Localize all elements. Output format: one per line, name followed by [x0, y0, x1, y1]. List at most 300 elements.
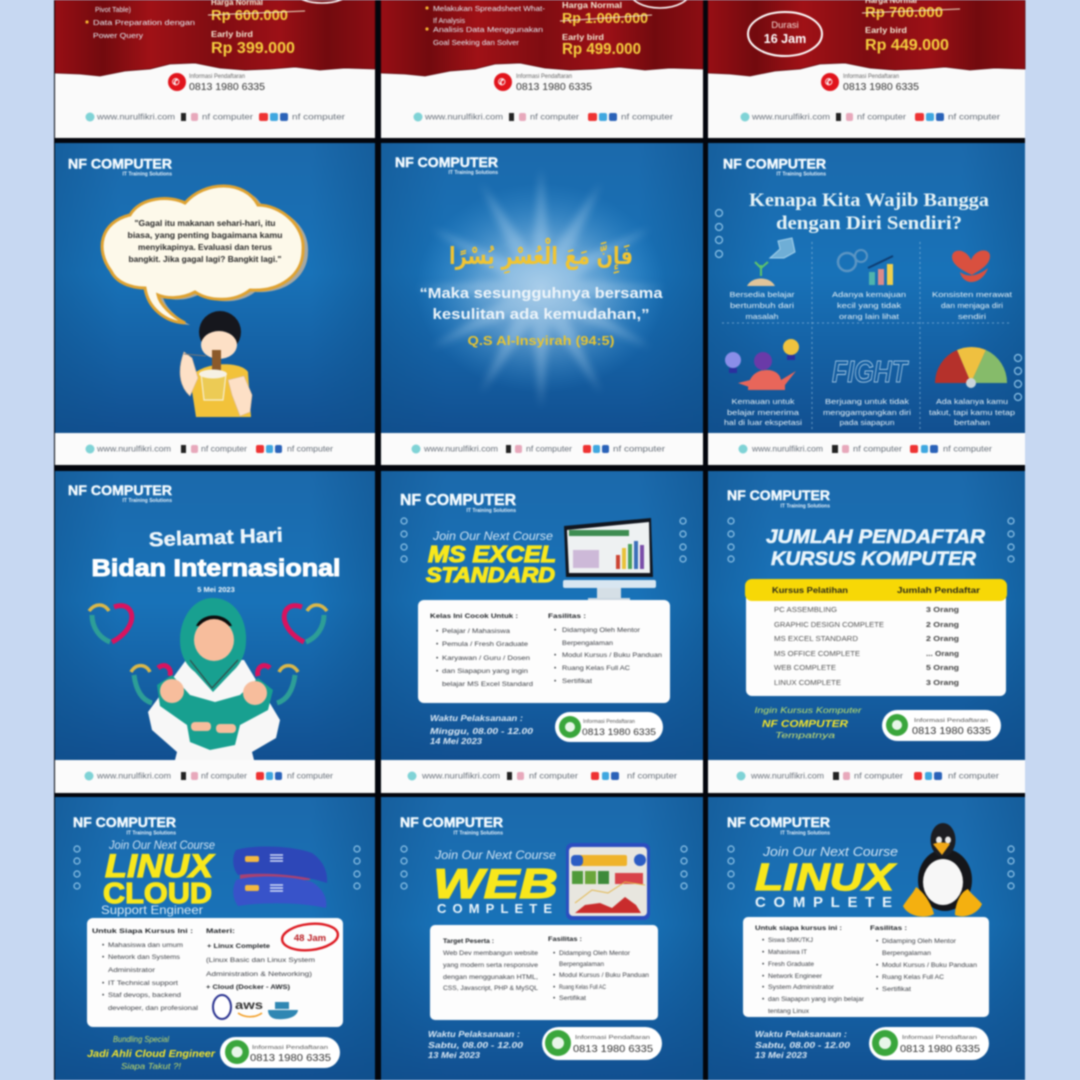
course topics [85, 5, 195, 40]
technology logos: aws [235, 998, 263, 1012]
logo: IT Training Solutions [781, 830, 830, 836]
icon: red heart [952, 250, 990, 282]
panel: Selamat Hari Bidan Internasional [55, 471, 375, 793]
icon: gears and growth bars [838, 250, 893, 285]
course title: LINUX [105, 848, 215, 884]
audience list: • [102, 942, 105, 949]
footer: nf computer [853, 444, 902, 454]
pricing: Rp 700.000 [865, 4, 943, 21]
cell captions: dan menjaga diri [941, 301, 1003, 310]
quote text [128, 219, 283, 264]
quote text: bangkit. Jika gagal lagi? Bangkit lagi." [128, 255, 282, 264]
footer: nf computer [287, 772, 333, 780]
heading: dengan Diri Sendiri? [776, 213, 962, 234]
facilities list: Didamping Oleh Mentor [882, 938, 957, 945]
audience list: • [436, 655, 439, 662]
sunburst glow [416, 168, 666, 408]
audience list: Mahasiswa dan umum [108, 942, 183, 949]
pricing: Early bird [865, 25, 907, 35]
registrant table: 3 Orang [926, 678, 959, 687]
audience list: Siswa SMK/TKJ [768, 937, 813, 944]
footer: www.nurulfikri.com [421, 772, 500, 780]
footer: nf computer [292, 112, 345, 122]
phone contact: 0813 1980 6335 [843, 82, 919, 93]
facilities list: Sertifikat [882, 986, 911, 993]
cell captions: hal di luar ekspetasi [724, 418, 802, 427]
cell captions: takut, tapi kamu tetap [929, 408, 1015, 417]
logo: NF COMPUTER [727, 487, 830, 503]
footer: www.nurulfikri.com [751, 112, 830, 122]
pricing: Rp 399.000 [211, 40, 295, 57]
quote text: biasa, yang penting bagaimana kamu [128, 231, 283, 240]
audience list: Pemula / Fresh Graduate [442, 641, 528, 648]
facilities list: • [553, 972, 556, 979]
icon: small hearts [131, 666, 298, 703]
audience list: • [762, 961, 765, 968]
facilities list: • [554, 665, 557, 672]
footer: nf computer [529, 772, 578, 780]
heading: KURSUS KOMPUTER [771, 549, 976, 570]
course topics: If Analysis [433, 16, 465, 25]
cell captions: bertumbuh dari [730, 301, 794, 310]
schedule: Waktu Pelaksanaan : [428, 1030, 520, 1039]
footer: nf computer [202, 112, 253, 122]
registrant table: 3 Orang [926, 605, 959, 614]
duration badge [630, 0, 690, 8]
footer: nf computer [948, 112, 1000, 122]
phone contact: Informasi Pendaftaran [516, 74, 572, 80]
course title: LINUX [755, 857, 897, 899]
WhatsApp contact pill [869, 1027, 989, 1060]
pricing: Rp 600.000 [211, 7, 288, 24]
facilities list: Berpengalaman [562, 640, 613, 647]
duration badge [748, 12, 822, 56]
facilities list: • [554, 627, 557, 634]
facilities list: • [554, 678, 557, 685]
badge: 48 jam [281, 921, 339, 953]
facilities list: Modul Kursus / Buku Panduan [562, 652, 662, 659]
audience list: Fresh Graduate [768, 961, 814, 968]
course tag: Join Our Next Course [762, 844, 898, 859]
audience list: belajar MS Excel Standard [442, 681, 533, 688]
registrant table: Jumlah Pendaftar [897, 586, 980, 595]
pricing [862, 0, 960, 54]
registrant table: Kursus Pelatihan [772, 586, 848, 595]
logo: NF COMPUTER [727, 814, 830, 830]
course title [103, 848, 215, 910]
course subtitle: COMPLETE [437, 901, 552, 916]
footer [412, 444, 665, 454]
audience list: dan Siapapun yang ingin [442, 668, 528, 675]
cell captions: orang lain lihat [839, 312, 900, 321]
audience list: • [102, 992, 105, 999]
course topics: Data Preparation dengan [93, 18, 195, 27]
cell captions: Ada kalanya kamu [936, 397, 1008, 406]
facilities list: Fasilitas : [548, 936, 582, 943]
course subtitle: Support Engineer [101, 903, 203, 917]
WhatsApp contact pill: Informasi Pendaftaran [914, 718, 988, 724]
cell captions: bertahan [954, 418, 990, 427]
icon: woman with light bulbs [725, 339, 799, 390]
cell captions: pada siapapun [840, 418, 894, 427]
panel: Linux Cloud Support Engineer course [55, 797, 375, 1080]
footer: nf computer [621, 112, 673, 122]
audience list: Staf devops, backend [108, 992, 181, 999]
facilities list [548, 936, 649, 1002]
registrant table: MS OFFICE COMPLETE [774, 651, 860, 658]
icon: sprout and watering can [747, 238, 795, 286]
footer [86, 444, 333, 454]
cell captions [724, 290, 1015, 427]
facilities list: • [553, 950, 556, 957]
course title: WEB [433, 860, 558, 907]
cell captions: menggampangkan diri [823, 408, 911, 417]
phone contact: ✆ [825, 77, 833, 87]
schedule: 13 Mei 2023 [755, 1051, 808, 1060]
call to action [754, 705, 863, 740]
info card [430, 925, 658, 1020]
WhatsApp contact pill: 0813 1980 6335 [573, 1043, 653, 1055]
panel: pricing poster with duration, top right [708, 0, 1025, 138]
WhatsApp contact pill: 0813 1980 6335 [900, 1043, 980, 1055]
course topics: Power Query [93, 31, 143, 40]
pricing: Harga Normal [562, 0, 622, 10]
footer [414, 112, 673, 122]
schedule: 13 Mei 2023 [428, 1051, 481, 1060]
cell captions: belajar menerima [727, 408, 800, 417]
footer [736, 772, 999, 780]
facilities list: • [876, 974, 879, 981]
logo: NF COMPUTER [723, 156, 826, 172]
WhatsApp contact pill [882, 710, 1001, 741]
registrant table: WEB COMPLETE [774, 665, 836, 672]
greeting: Selamat Hari [148, 525, 283, 551]
logo: IT Training Solutions [123, 172, 172, 178]
facilities list: Fasilitas : [870, 925, 907, 932]
audience list: Mahasiswa IT [768, 949, 807, 956]
icon: hearts left [89, 605, 132, 642]
duration badge: 16 Jam [764, 32, 806, 46]
course subtitle: COMPLETE [755, 894, 892, 911]
footer: nf computer [627, 772, 677, 780]
target audience [443, 938, 538, 992]
panel: Web Complete course [381, 797, 703, 1080]
footer: nf computer [854, 772, 903, 780]
facilities list: • [876, 986, 879, 993]
footer: www.nurulfikri.com [751, 444, 823, 454]
course topics: Analisis Data Menggunakan [433, 25, 543, 34]
Arabic verse: فَإِنَّ مَعَ الْعُسْرِ يُسْرًا [449, 238, 633, 274]
logo: NF COMPUTER [68, 482, 172, 498]
panel: motivational quote with boy eating noodles [55, 143, 375, 465]
info card [418, 600, 670, 703]
illustration: web browser dashboard [566, 843, 650, 920]
audience list: Kelas Ini Cocok Untuk : [430, 613, 518, 620]
registrant table: 2 Orang [926, 634, 959, 643]
WhatsApp contact pill: Informasi Pendaftaran [902, 1035, 977, 1041]
materials list: (Linux Basic dan Linux System [206, 957, 315, 964]
WhatsApp contact pill [542, 1027, 662, 1060]
target audience: dengan menggunakan HTML, [443, 974, 538, 981]
decorative dots [74, 846, 360, 889]
course tag: Join Our Next Course [432, 529, 553, 543]
audience list [92, 928, 199, 1012]
logo: IT Training Solutions [454, 830, 503, 836]
phone contact: Informasi Pendaftaran [189, 74, 245, 80]
course topics: Pivot Table) [95, 5, 131, 14]
panel: Kenapa Kita Wajib Bangga [708, 143, 1025, 465]
materials list [206, 928, 315, 991]
phone contact: 0813 1980 6335 [189, 82, 265, 93]
phone contact [821, 73, 919, 93]
facilities list: Didamping Oleh Mentor [559, 950, 631, 957]
call to action: Ingin Kursus Komputer [754, 705, 863, 715]
audience list: • [762, 996, 765, 1003]
audience list: tentang Linux [768, 1008, 810, 1015]
audience list: • [762, 973, 765, 980]
phone contact: Informasi Pendaftaran [843, 74, 899, 80]
audience list: Network Engineer [768, 973, 823, 980]
panel: Jumlah Pendaftar table [708, 471, 1025, 793]
logo: IT Training Solutions [127, 830, 176, 836]
audience list: • [762, 984, 765, 991]
decorative dots [401, 846, 687, 889]
materials list: Materi: [206, 928, 235, 935]
course tag: Join Our Next Course [434, 848, 556, 862]
materials list: + Linux Complete [207, 943, 270, 950]
logo: IT Training Solutions [467, 508, 516, 514]
facilities list: • [553, 995, 556, 1002]
footer [84, 772, 333, 780]
promo text [87, 1034, 216, 1071]
heading: JUMLAH PENDAFTAR [766, 527, 985, 548]
footer: www.nurulfikri.com [750, 772, 824, 780]
registrant table: MS EXCEL STANDARD [774, 636, 858, 643]
target audience: Web Dev membangun website [443, 950, 538, 957]
icon: mood gauge [935, 347, 1007, 388]
footer: nf computer [857, 112, 906, 122]
cell captions: Bersedia belajar [730, 290, 795, 299]
pricing: Early bird [211, 29, 253, 39]
footer: www.nurulfikri.com [96, 772, 171, 780]
audience list: • [436, 668, 439, 675]
audience list: Network dan Systems [108, 954, 181, 961]
facilities list: Ruang Kelas Full AC [562, 665, 630, 672]
registrant table: PC ASSEMBLING [774, 607, 837, 614]
illustration: boy with noodles [180, 311, 252, 417]
WhatsApp contact pill: 0813 1980 6335 [912, 726, 991, 737]
course tag: Join Our Next Course [108, 838, 215, 852]
facilities list: Sertifikat [562, 678, 592, 685]
registrant table: ... Orang [926, 649, 959, 658]
facilities list: • [553, 984, 556, 991]
heading: Kenapa Kita Wajib Bangga [749, 190, 990, 211]
cell captions: Berjuang untuk tidak [825, 397, 909, 406]
logo: NF COMPUTER [400, 814, 503, 830]
course topics [425, 4, 546, 47]
translation [420, 285, 663, 323]
promo text: Siapa Takut ?! [121, 1061, 182, 1071]
translation: “Maka sesungguhnya bersama [420, 285, 663, 302]
speech bubble [102, 186, 308, 325]
target audience: Target Peserta : [443, 938, 494, 945]
audience list: • [102, 954, 105, 961]
date: 5 Mei 2023 [197, 585, 235, 594]
pricing [208, 0, 305, 57]
phone contact: ✆ [172, 77, 180, 87]
footer: nf computer [613, 444, 665, 454]
pricing: Early bird [562, 32, 604, 42]
course title: STANDARD [426, 564, 555, 587]
badge: 48 jam: 48 Jam [294, 933, 326, 944]
registrant table: GRAPHIC DESIGN COMPLETE [774, 622, 884, 629]
WhatsApp contact pill: 0813 1980 6335 [582, 727, 656, 738]
illustration: midwife holding babies [148, 598, 280, 760]
promo text: Bundling Special [113, 1034, 170, 1044]
audience list: Pelajar / Mahasiswa [442, 628, 510, 635]
duration badge: Durasi [771, 20, 799, 31]
registrant table: LINUX COMPLETE [774, 680, 841, 687]
pricing: Rp 1.000.000 [562, 10, 648, 27]
quote text: menyikapinya. Evaluasi dan terus [138, 243, 273, 252]
logo: NF COMPUTER [400, 492, 516, 509]
registrant table: 2 Orang [926, 620, 959, 629]
heading [766, 527, 985, 570]
info card [743, 917, 989, 1017]
facilities list: Sertifikat [559, 995, 586, 1002]
footer: www.nurulfikri.com [96, 444, 171, 454]
footer [740, 112, 1000, 122]
audience list: IT Technical support [108, 980, 178, 987]
target audience: CSS, Javascript, PHP & MySQL [443, 985, 538, 992]
facilities list: • [554, 652, 557, 659]
materials list: Administration & Networking) [206, 971, 312, 978]
WhatsApp contact pill [220, 1037, 340, 1068]
audience list: Untuk siapa kursus ini : [755, 925, 842, 932]
phone contact: ✆ [498, 77, 506, 87]
logo: IT Training Solutions [123, 498, 172, 504]
audience list: • [102, 980, 105, 987]
schedule [428, 1030, 524, 1060]
facilities list: Ruang Kelas Full AC [559, 984, 606, 991]
facilities list [548, 613, 662, 685]
pricing: Rp 449.000 [865, 37, 949, 54]
cell captions: Kemauan untuk [732, 397, 795, 406]
facilities list: Modul Kursus / Buku Panduan [882, 962, 977, 969]
panel: Excel pricing poster, top left [55, 0, 375, 138]
audience list: Karyawan / Guru / Dosen [442, 655, 530, 662]
pricing: Rp 499.000 [562, 41, 641, 58]
info card [87, 918, 343, 1027]
facilities list: Didamping Oleh Mentor [562, 627, 641, 634]
audience list [430, 613, 533, 688]
panel: Linux Complete course [708, 797, 1025, 1080]
decorative dots [401, 518, 686, 562]
facilities list: Berpengalaman [559, 961, 604, 968]
illustration: monitor with spreadsheet [563, 518, 656, 601]
WhatsApp contact pill: Informasi Pendaftaran [575, 1035, 650, 1041]
audience list: • [436, 641, 439, 648]
verse reference: Q.S Al-Insyirah (94:5) [468, 334, 614, 348]
footer: nf computer [201, 444, 247, 454]
audience list: developer, dan profesional [108, 1005, 199, 1012]
facilities list [870, 925, 977, 993]
audience list: Untuk Siapa Kursus Ini : [92, 928, 193, 935]
registrant table [745, 579, 1007, 696]
decorative dots [728, 846, 1014, 889]
footer: nf computer [948, 772, 999, 780]
facilities list: • [876, 962, 879, 969]
logo: IT Training Solutions [781, 504, 830, 510]
cell captions: kecil yang tidak [837, 301, 901, 310]
facilities list: • [876, 938, 879, 945]
schedule [755, 1030, 851, 1060]
duration badge [295, 0, 349, 3]
audience list: • [436, 628, 439, 635]
decorative dots [728, 518, 1014, 562]
audience list [755, 925, 865, 1015]
heading [749, 190, 990, 234]
WhatsApp contact pill: 0813 1980 6335 [250, 1053, 331, 1064]
decorative dots [716, 210, 1022, 400]
call to action: Tempatnya [775, 730, 835, 740]
WhatsApp contact pill: Informasi Pendaftaran [583, 719, 635, 725]
logo: IT Training Solutions [449, 170, 498, 176]
footer: www.nurulfikri.com [423, 444, 498, 454]
call to action: NF COMPUTER [762, 719, 849, 730]
technology logos [213, 995, 298, 1019]
quote text: "Gagal itu makanan sehari-hari, itu [134, 219, 276, 228]
cell captions: sendiri [958, 312, 986, 321]
schedule: Waktu Pelaksanaan : [755, 1030, 847, 1039]
panel: MS Excel Standard course [381, 471, 703, 793]
facilities list: Berpengalaman [882, 950, 931, 957]
promo text: Jadi Ahli Cloud Engineer [87, 1049, 216, 1060]
logo: NF COMPUTER [395, 154, 498, 170]
illustration: Tux penguin [903, 823, 982, 917]
logo: NF COMPUTER [73, 814, 176, 830]
schedule: Waktu Pelaksanaan : [430, 714, 523, 723]
course title: CLOUD [103, 878, 212, 910]
footer: nf computer [943, 444, 992, 454]
WhatsApp contact pill [555, 712, 663, 742]
course title: MS EXCEL [428, 541, 556, 567]
course title [426, 541, 556, 587]
panel: Quran verse [381, 143, 703, 465]
facilities list: Modul Kursus / Buku Panduan [559, 972, 649, 979]
audience list: • [762, 937, 765, 944]
panel: Excel advanced pricing poster, top centre [381, 0, 703, 138]
illustration: server stack [233, 847, 327, 908]
facilities list: Fasilitas : [548, 613, 586, 620]
phone contact [494, 73, 592, 93]
phone contact [168, 73, 265, 93]
cell captions: Konsisten merawat [932, 290, 1013, 299]
materials list: + Cloud (Docker - AWS) [206, 984, 290, 991]
cell captions: Adanya kemajuan [832, 290, 906, 299]
schedule: Minggu, 08.00 - 12.00 [430, 727, 534, 736]
schedule [430, 714, 534, 746]
audience list: • [762, 949, 765, 956]
logo: NF COMPUTER [68, 156, 172, 172]
phone contact: 0813 1980 6335 [516, 82, 592, 93]
footer [86, 112, 345, 122]
audience list: Administrator [108, 967, 156, 974]
pricing [560, 0, 652, 58]
schedule: 14 Mei 2023 [430, 737, 483, 746]
facilities list: Ruang Kelas Full AC [882, 974, 944, 981]
course topics: Melakukan Spreadsheet What- [433, 4, 546, 13]
